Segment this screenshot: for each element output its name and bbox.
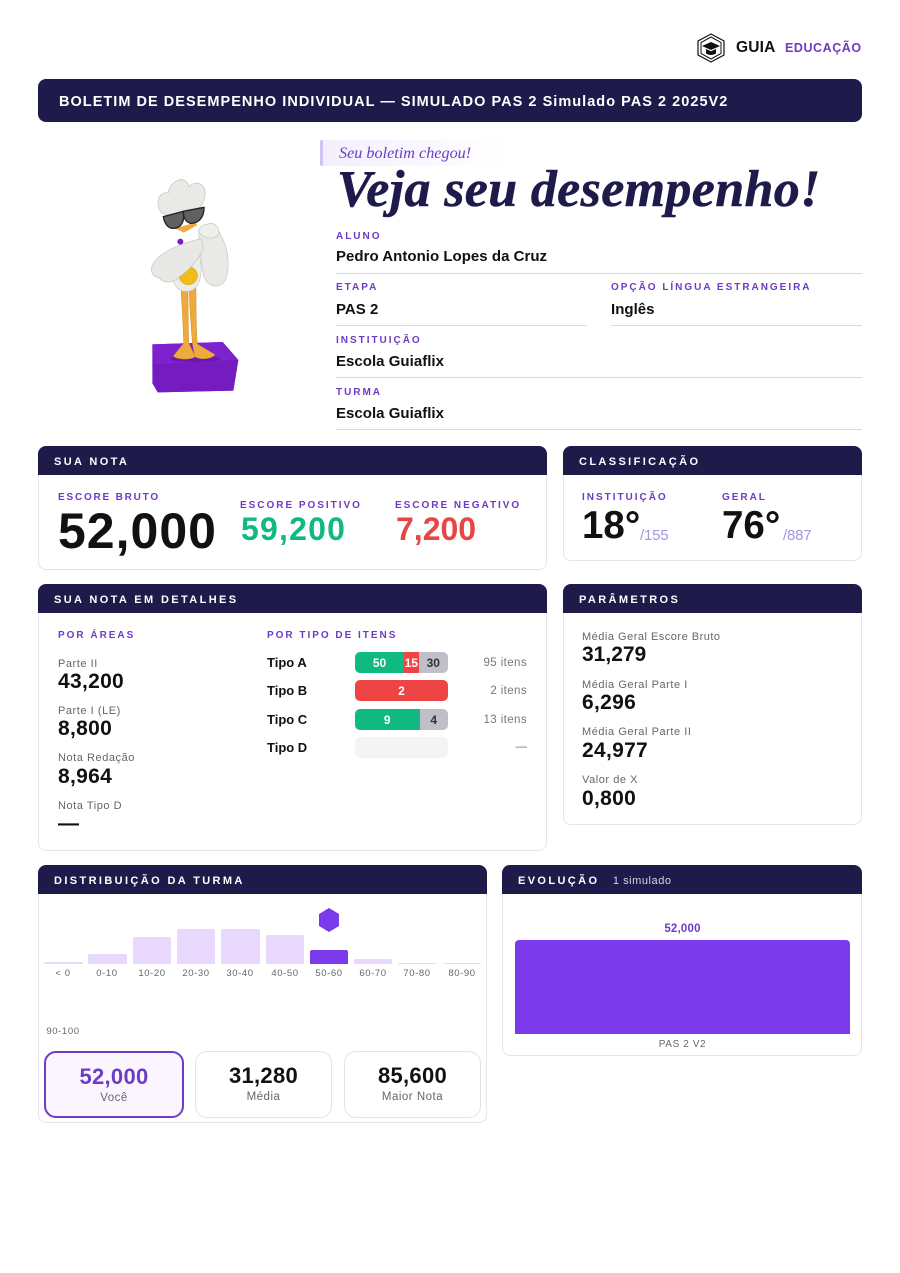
field: etapa: PAS 2 (336, 301, 378, 318)
field: etapa (336, 282, 587, 326)
stat: média (195, 1051, 332, 1118)
score: nota tipo D (58, 800, 122, 835)
row: tipo C: 13 itens (484, 714, 527, 726)
histogram chart: 90-100 (46, 1026, 80, 1037)
param: média geral parte I: 6,296 (582, 691, 636, 714)
stat: maior nota: Maior Nota (382, 1091, 443, 1103)
marker: your position (319, 908, 339, 932)
row: tipo A (267, 652, 527, 673)
stat: você: Você (100, 1092, 128, 1104)
field: aluno: Pedro Antonio Lopes da Cruz (336, 248, 547, 265)
escore positivo: 59,200 (241, 511, 346, 547)
histogram chart: 30-40 (226, 968, 254, 979)
logo: Guia Educação: EDUCAÇÃO (785, 41, 862, 55)
param: média geral escore bruto: Média Geral Escore Bruto (582, 631, 721, 643)
legs and feet (173, 288, 215, 359)
stat: maior nota (344, 1051, 481, 1118)
body (172, 255, 201, 291)
escore negativo (395, 500, 521, 547)
sunglasses (163, 207, 204, 228)
evolution bar (515, 940, 850, 1034)
mascot illustration (151, 179, 238, 392)
panel: classificação (563, 446, 862, 561)
label: por áreas: POR ÁREAS (58, 630, 135, 641)
bow (177, 239, 183, 245)
heading: sua nota (38, 446, 547, 475)
row: tipo D: Tipo D (267, 740, 307, 755)
medal (179, 267, 197, 285)
score: parte II: Parte II (58, 658, 98, 670)
title banner: BOLETIM DE DESEMPENHO INDIVIDUAL — SIMULADO PAS 2 Simulado PAS 2 2025V2 (59, 94, 728, 110)
stat: você: 52,000 (79, 1064, 149, 1089)
student info fields (336, 231, 862, 430)
field: turma: TURMA (336, 387, 382, 398)
field: turma (336, 387, 862, 430)
por áreas (58, 629, 135, 835)
heading: classificação: CLASSIFICAÇÃO (579, 456, 700, 468)
score: parte I: 8,800 (58, 717, 112, 740)
stat: média: Média (247, 1091, 280, 1103)
param: média geral parte II: 24,977 (582, 739, 648, 762)
score: parte I: Parte I (LE) (58, 705, 121, 717)
param: valor de X: Valor de X (582, 774, 638, 786)
axis label: PAS 2 V2 (659, 1039, 706, 1050)
rank instituição: /155 (640, 527, 668, 544)
pedestal (152, 342, 238, 392)
label: por tipo de itens: POR TIPO DE ITENS (267, 630, 397, 641)
histogram chart: 10-20 (138, 968, 166, 979)
score: nota redação: 8,964 (58, 765, 112, 788)
row: tipo A: 30 (427, 656, 440, 670)
field: opção língua estrangeira (611, 281, 862, 326)
histogram chart: 60-70 (359, 968, 387, 979)
field: etapa: ETAPA (336, 282, 378, 293)
score: nota redação: Nota Redação (58, 752, 135, 764)
escore positivo: ESCORE POSITIVO (240, 500, 362, 511)
heading: evolução: EVOLUÇÃO 1 simulado (518, 875, 672, 887)
head crest (158, 180, 205, 215)
panel: parâmetros (563, 584, 862, 825)
field: instituição: INSTITUIÇÃO (336, 335, 422, 346)
wing: left (151, 239, 203, 282)
param: média geral escore bruto: 31,279 (582, 643, 646, 666)
icon: hexagon graduation cap (697, 33, 725, 63)
histogram chart: 70-80 (403, 968, 431, 979)
score: nota tipo D: — (58, 812, 79, 835)
histogram chart: 40-50 (271, 968, 299, 979)
heading: distribuição da turma: DISTRIBUIÇÃO DA TURMA (54, 875, 245, 887)
escore positivo (240, 500, 362, 547)
param: valor de X (582, 774, 638, 810)
param: média geral parte I (582, 679, 688, 714)
panel: sua nota em detalhes (38, 584, 547, 851)
field: aluno: ALUNO (336, 231, 381, 242)
score: parte II: 43,200 (58, 670, 124, 693)
rank geral (722, 492, 811, 547)
score: parte II (58, 658, 124, 693)
callout: seu boletim chegou: Seu boletim chegou! (339, 144, 471, 162)
wing: right (199, 227, 228, 286)
field: instituição: Escola Guiaflix (336, 353, 444, 370)
histogram chart: 0-10 (96, 968, 118, 979)
row: tipo D: — (516, 741, 527, 753)
panel: evolução (502, 865, 862, 1056)
histogram chart: 80-90 (448, 968, 476, 979)
histogram chart: < 0 (55, 968, 71, 979)
escore bruto: ESCORE BRUTO (58, 492, 160, 503)
row: tipo C: Tipo C (267, 712, 307, 727)
histogram chart: 20-30 (182, 968, 210, 979)
param: média geral parte II (582, 726, 691, 762)
score: nota redação (58, 752, 135, 788)
stat: você (44, 1051, 184, 1118)
param: média geral parte II: Média Geral Parte II (582, 726, 691, 738)
panel: sua nota (38, 446, 547, 570)
histogram chart (44, 908, 481, 1037)
row: tipo A: 15 (405, 656, 418, 670)
field: instituição (336, 334, 862, 378)
row: tipo C (267, 709, 527, 730)
row: tipo A: Tipo A (267, 655, 307, 670)
row: tipo D (267, 737, 527, 758)
row: tipo A: 50 (373, 656, 386, 670)
row: tipo B: 2 (398, 684, 405, 698)
panel: distribuição da turma (38, 865, 487, 1123)
field: turma: Escola Guiaflix (336, 405, 444, 422)
beak (175, 223, 197, 233)
stat: média: 31,280 (229, 1063, 298, 1088)
heading: sua nota: SUA NOTA (54, 456, 129, 468)
heading: parâmetros (563, 584, 862, 613)
logo wordmark: GUIA (736, 39, 776, 56)
heading: classificação (563, 446, 862, 475)
title banner (38, 79, 862, 122)
rank instituição (582, 491, 668, 547)
row: tipo B (267, 680, 527, 701)
heading: sua nota em detalhes (38, 584, 547, 613)
axis labels (46, 968, 476, 1037)
heading: sua nota em detalhes: SUA NOTA EM DETALHES (54, 594, 238, 606)
rank geral: 76° (722, 504, 780, 547)
score: nota tipo D: Nota Tipo D (58, 800, 122, 812)
stat: maior nota: 85,600 (378, 1063, 447, 1088)
field: opção língua estrangeira: Inglês (611, 301, 655, 318)
main heading: Veja seu desempenho! (337, 161, 821, 218)
score: parte I (58, 705, 121, 740)
heading: parâmetros: PARÂMETROS (579, 594, 680, 606)
heading: distribuição da turma (38, 865, 487, 894)
field: aluno (336, 231, 862, 274)
logo wordmark (736, 39, 862, 56)
param: média geral parte I: Média Geral Parte I (582, 679, 688, 691)
rank instituição: 18° (582, 504, 640, 547)
value label: 52,000 (664, 923, 701, 935)
param: média geral escore bruto (582, 631, 721, 666)
rank geral: /887 (783, 527, 811, 544)
escore bruto: 52,000 (58, 503, 217, 559)
escore negativo: ESCORE NEGATIVO (395, 500, 521, 511)
field: opção língua estrangeira: OPÇÃO LÍNGUA ESTRANGEIRA (611, 282, 812, 293)
hand (198, 223, 219, 238)
histogram chart: 50-60 (315, 968, 343, 979)
logo: Guia Educação (697, 33, 862, 63)
rank instituição: INSTITUIÇÃO (582, 492, 668, 503)
row: tipo B: Tipo B (267, 683, 307, 698)
row: tipo B: 2 itens (490, 685, 527, 697)
row: tipo A: 95 itens (484, 657, 527, 669)
rank geral: GERAL (722, 492, 767, 503)
row: tipo C: 4 (430, 713, 437, 727)
param: valor de X: 0,800 (582, 787, 636, 810)
row: tipo C: 9 (384, 713, 391, 727)
heading: evolução (502, 865, 862, 894)
callout: seu boletim chegou (320, 140, 510, 166)
bars (44, 929, 481, 964)
escore negativo: 7,200 (396, 511, 476, 547)
